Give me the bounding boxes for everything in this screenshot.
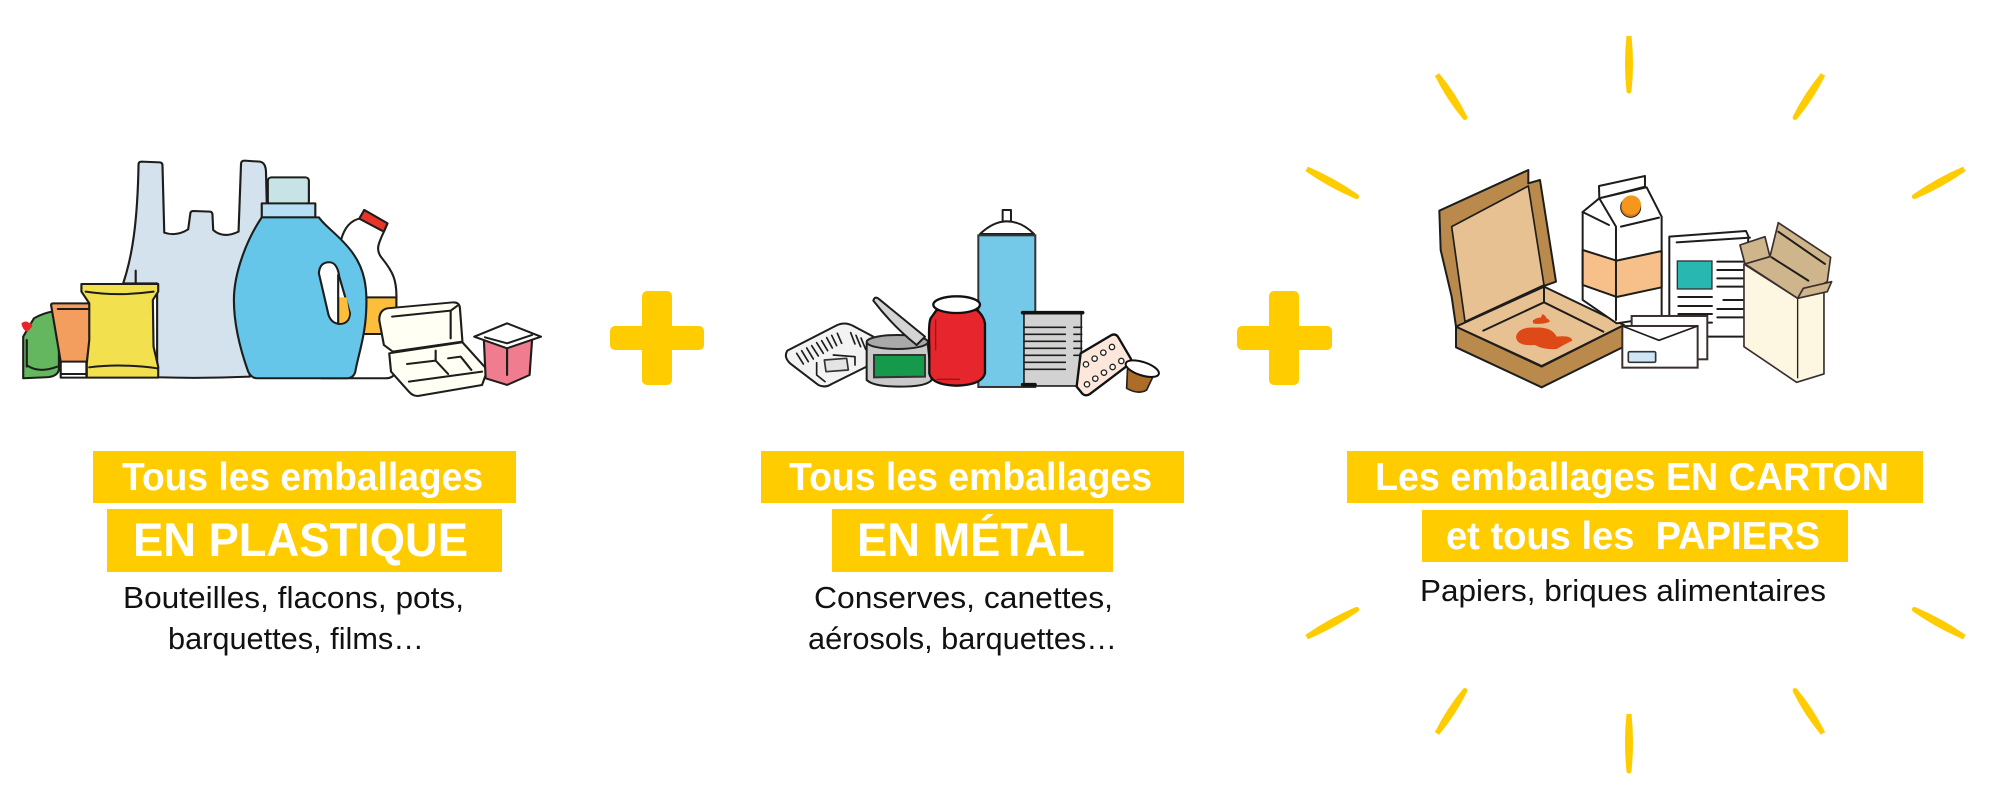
icon: coffee capsule	[1124, 357, 1161, 392]
text: plastic examples: barquettes, films…	[168, 621, 424, 656]
text: plastic examples: Bouteilles, flacons, pots,	[123, 580, 464, 615]
caption: cardboard and paper	[1347, 451, 1923, 608]
icon: milk carton	[1583, 176, 1662, 323]
icon: envelopes	[1622, 316, 1707, 368]
icon: newspaper	[1669, 231, 1750, 337]
text: metal examples	[808, 580, 1117, 656]
caption: plastic	[93, 451, 516, 656]
icon: plastic bag	[123, 161, 267, 378]
text: metal examples: aérosols, barquettes…	[808, 621, 1117, 656]
illustration: plastic packaging	[21, 161, 541, 396]
icon: yogurt pot	[474, 323, 541, 385]
icon: blister pack	[1077, 334, 1131, 395]
heading label: tous les emballages: Tous les emballages	[789, 456, 1152, 499]
icon: red can	[929, 296, 985, 386]
plus sign	[610, 291, 704, 385]
illustration: metal packaging	[786, 210, 1161, 395]
icon: blue detergent jug	[234, 177, 366, 378]
icon: silver food can	[1023, 313, 1083, 386]
icon: cereal box	[1740, 223, 1832, 382]
icon: pizza box	[1439, 170, 1624, 387]
heading label: en plastique: EN PLASTIQUE	[133, 513, 468, 566]
icon: aluminium tray	[786, 324, 873, 386]
plus sign	[1237, 291, 1332, 385]
text: metal examples: Conserves, canettes,	[814, 580, 1113, 615]
heading label: emballages en carton: Les emballages EN CARTON	[1375, 456, 1889, 499]
icon: orange tube	[51, 303, 95, 378]
sun rays around the paper illustration	[1306, 36, 1965, 771]
icon: green pouch	[21, 312, 59, 378]
icon: takeaway clamshell tray	[379, 302, 487, 396]
text: plastic examples	[123, 580, 464, 656]
icon: tin can with green label	[867, 298, 932, 387]
heading label: tous les emballages: Tous les emballages	[122, 456, 483, 499]
heading label: tous les papiers: et tous les PAPIERS	[1446, 515, 1820, 558]
illustration: cardboard and paper packaging	[1439, 170, 1832, 387]
heading label: en metal: EN MÉTAL	[857, 513, 1085, 566]
icon: aerosol can	[978, 210, 1035, 387]
caption: metal	[761, 451, 1184, 656]
icon: bleach bottle	[321, 210, 396, 378]
icon: yellow packet	[81, 271, 158, 378]
text: paper examples: Papiers, briques alimentaires	[1420, 573, 1826, 608]
